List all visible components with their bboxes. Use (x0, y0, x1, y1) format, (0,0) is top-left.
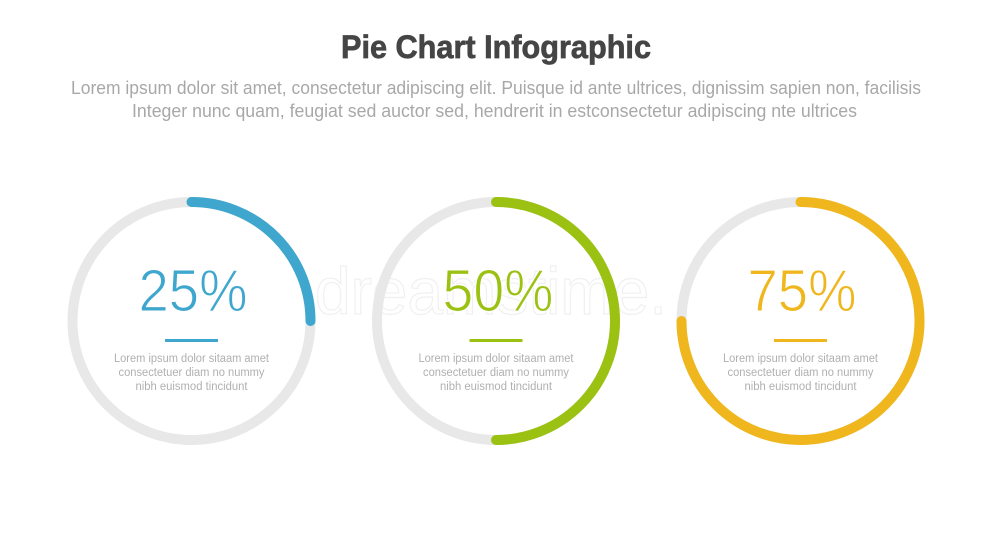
subtitle text: Lorem ipsum dolor sit amet, consectetur adipiscing elit. Puisque id ante ultrices, dignissim sapien non, facilisis (71, 77, 921, 98)
percentage 25%: 25% (138, 258, 248, 324)
ring arc 75% (682, 202, 920, 440)
percentage 50%: 50% (442, 258, 554, 324)
description 50%: nibh euismod tincidunt (440, 381, 553, 393)
divider 50% (470, 339, 522, 342)
ring track 75% (682, 202, 920, 440)
title: Pie Chart Infographic (341, 29, 651, 65)
ring track 50% (377, 202, 615, 440)
subtitle text (71, 77, 921, 121)
description 75%: Lorem ipsum dolor sitaam amet (723, 353, 879, 365)
description 25%: nibh euismod tincidunt (136, 381, 248, 393)
panel: 75% progress ring (682, 202, 920, 440)
subtitle text: Integer nunc quam, feugiat sed auctor sed, hendrerit in estconsectetur adipiscing nte ultrices (132, 100, 857, 121)
divider 25% (165, 339, 218, 342)
panel: 50% progress ring (377, 202, 615, 440)
description 25%: Lorem ipsum dolor sitaam amet (114, 353, 270, 365)
divider 75% (774, 339, 827, 342)
description 25%: consectetuer diam no nummy (118, 367, 265, 379)
description 50%: Lorem ipsum dolor sitaam amet (418, 353, 574, 365)
description 50% (418, 353, 574, 393)
ring track 25% (72, 202, 310, 440)
description 75%: consectetuer diam no nummy (728, 367, 874, 379)
description 50%: consectetuer diam no nummy (423, 367, 569, 379)
description 25% (114, 353, 270, 393)
percentage 75%: 75% (748, 258, 856, 324)
ring arc 50% (496, 202, 615, 440)
text: dreamstime. (315, 254, 667, 328)
panel: 25% progress ring (72, 202, 310, 440)
ring arc 25% (192, 202, 310, 321)
description 75%: nibh euismod tincidunt (744, 381, 857, 393)
description 75% (723, 353, 879, 393)
